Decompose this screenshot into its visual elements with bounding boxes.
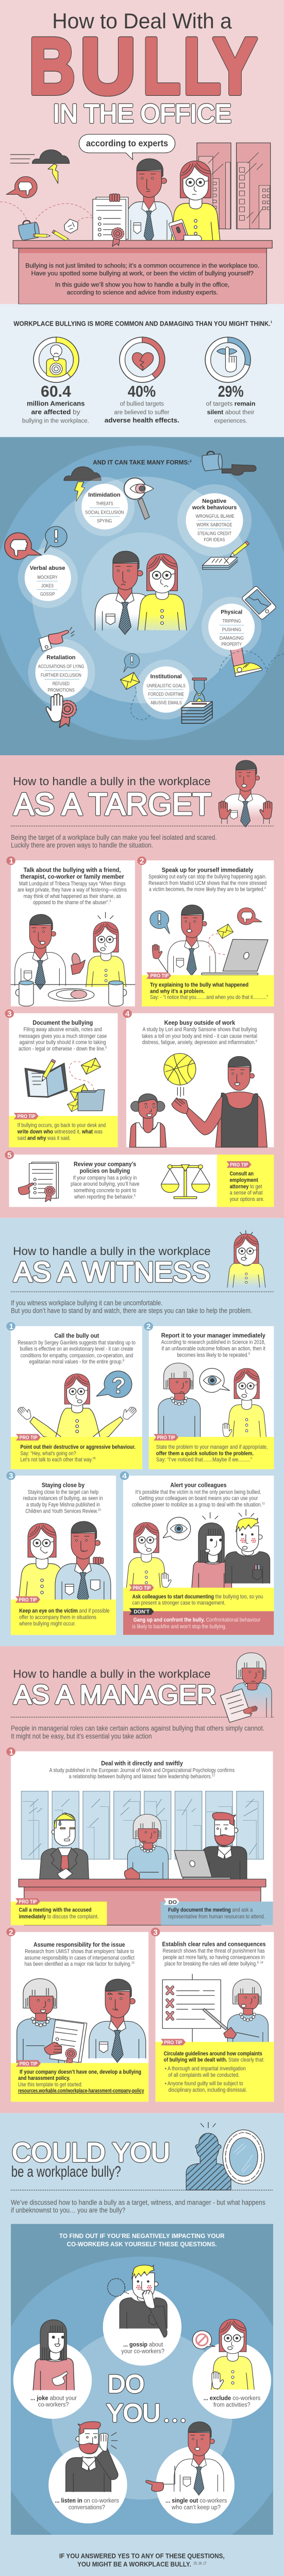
card 3: document the bullying: 5	[105, 1046, 107, 1049]
card 2: report to manager: becomes less likely to be repeated.	[177, 1352, 270, 1358]
badge 1	[6, 1322, 15, 1331]
badge 4: 4	[125, 1010, 130, 1019]
card 5: review company policies: 5	[134, 1194, 136, 1198]
card 2: assume responsibility: assume responsibility in cases of interpersonal conflict	[24, 1955, 135, 1961]
heading: as a witness: AS A WITNESS	[13, 1256, 210, 1287]
card 5: review company policies: Consult an	[230, 1171, 254, 1177]
card 1: call the bully out: Say: “Hey, what’s going on?	[20, 1451, 76, 1456]
card 5: review company policies: If your company has a policy in	[73, 1175, 137, 1181]
card 1: deal with it directly: Call a meeting with the accused	[19, 1907, 92, 1913]
title	[29, 9, 257, 128]
speech bubble: according to experts: according to experts	[86, 138, 168, 148]
illustration: alarmed woman	[227, 1230, 265, 1287]
panel: do you questions: CO-WORKERS ASK YOURSELF THESE QUESTIONS.	[67, 2241, 217, 2248]
badge 3: 3	[7, 1010, 12, 1019]
card 2: speak up: 4	[264, 886, 266, 890]
title: L	[143, 22, 180, 111]
question: joke	[13, 2320, 92, 2419]
card 3: staying close by: where bullying might occur.	[19, 1621, 76, 1627]
circle: verbal abuse: GOSSIP	[40, 591, 55, 597]
card 5: review company policies: place around bullying, you’ll have	[71, 1181, 140, 1188]
intro: manager	[11, 1724, 264, 1740]
circle: retaliation: FURTHER EXCLUSION	[41, 673, 81, 678]
circle: physical: PROPERTY	[221, 642, 242, 648]
office windows	[197, 143, 271, 229]
card 1: talk about the bullying	[11, 860, 135, 1006]
question: exclude: from activities?	[213, 2401, 250, 2409]
card 1: talk about the bullying: may think of what happened as their shame, as	[24, 893, 121, 900]
card 4: alert your colleagues: 11	[262, 1502, 265, 1505]
illustration: policy document and hand	[93, 194, 128, 241]
card 5: review company policies	[9, 1155, 274, 1207]
circle: retaliation: Retaliation	[46, 655, 76, 660]
card 1: deal with it directly: a relationship between bullying and laissez faire leadership behaviors.	[69, 1774, 254, 1780]
card 2: assume responsibility: Research from UMIST shows that employers’ failure to	[25, 1948, 134, 1955]
card 4: alert your colleagues: Alert your colleagues	[170, 1482, 227, 1489]
circle: institutional: ABUSIVE EMAILS	[151, 700, 182, 706]
card 4: keep busy	[126, 1013, 274, 1147]
header section background	[0, 0, 284, 304]
badge 4: 4	[122, 1472, 127, 1481]
card 2: assume responsibility: Assume responsibility for the issue	[34, 1941, 125, 1948]
card 1: call the bully out: Research by Sergey Gavrilets suggests that standing up to	[18, 1340, 136, 1346]
stat: 40 percent: adverse health effects.	[105, 416, 179, 424]
card 3: staying close by: Children and Youth Services Review.	[25, 1509, 123, 1514]
section background: could you	[0, 2113, 284, 2576]
do you lettering: DO	[108, 2370, 144, 2398]
card 5: review company policies: when reporting the behavior.	[74, 1194, 149, 1200]
card 3: document the bullying: Filing away abusive emails, notes and	[24, 1027, 102, 1033]
card 3: document the bullying: against your bully should it come to taking	[20, 1040, 106, 1046]
circle: negative work behaviours: WORK SABOTAGE	[196, 522, 232, 528]
circle: intimidation	[64, 467, 154, 536]
card 1: call the bully out: Let’s not talk to each other that way.”	[20, 1457, 118, 1463]
circle: retaliation: REFUSED	[53, 681, 70, 687]
card 4: keep busy: 6	[256, 1040, 257, 1043]
conclusion text: YOU MIGHT BE A WORKPLACE BULLY.	[77, 2561, 191, 2568]
divider	[11, 1291, 274, 1293]
card 3: staying close by: Staying close to the target can help	[28, 1489, 98, 1495]
card 2: assume responsibility: Use this template to get started:	[18, 2082, 82, 2088]
circle: negative work behaviours: Negative	[202, 498, 226, 504]
question: listen in: ... listen in on co-workers	[55, 2497, 119, 2504]
card 1: call the bully out	[11, 1326, 142, 1469]
card 2: report to manager: offer them a quick solution to the problem.	[156, 1451, 254, 1456]
badge 3	[6, 1471, 15, 1481]
card 1: talk about the bullying: opposed to the shame of the abuser”.	[33, 900, 132, 906]
desk	[13, 241, 272, 304]
title: U	[80, 22, 136, 111]
badge 3	[5, 1009, 14, 1019]
card 3: staying close by: a study by Faye Mishna published in	[26, 1502, 100, 1508]
intro: target: Being the target of a workplace bully can make you feel isolated and scared.	[11, 834, 217, 842]
speech bubble: according to experts	[79, 134, 175, 160]
intro text: Bullying is not just limited to schools; it’s a common occurrence in the workplace too.	[25, 262, 259, 269]
circle: institutional: Institutional	[151, 674, 182, 680]
card 5: review company policies: policies on bullying	[80, 1167, 130, 1175]
card 3: document the bullying: If bullying occurs, go back to your desk and	[18, 1123, 106, 1129]
title: IN THE OFFICE	[53, 99, 231, 128]
heading: as a target: How to handle a bully in the workplace	[13, 775, 211, 788]
stat: 60.4 million: 60.4	[41, 382, 71, 400]
conclusion text: IF YOU ANSWERED YES TO ANY OF THESE QUESTIONS,	[59, 2552, 225, 2560]
card 1: talk about the bullying: 3	[109, 900, 111, 903]
card 2: report to manager: 9	[248, 1352, 250, 1355]
circle: verbal abuse: MOCKERY	[37, 575, 58, 580]
card 3: staying close by: 10	[98, 1508, 101, 1512]
card 3: document the bullying: Document the bullying	[32, 1019, 93, 1026]
card 3: document the bullying: action - legal or otherwise - down the line.	[19, 1046, 129, 1052]
card 1: call the bully out: egalitarian moral values - for the entire group.	[29, 1359, 149, 1365]
card 3: document the bullying: PRO TIP	[18, 1113, 36, 1120]
stat: 29 percent: 29%	[218, 382, 244, 400]
card 3: clear rules: of bullying will be dealt with. State clearly that:	[164, 2057, 264, 2063]
intro: target	[11, 834, 217, 850]
heading: as a manager	[13, 1668, 216, 1710]
card 2: speak up: Speak up for yourself immediately	[162, 867, 253, 873]
intro: witness	[11, 1299, 252, 1315]
card 2: assume responsibility: resources.workable.com/workplace-harassment-company-policy	[18, 2088, 144, 2094]
question: single out: who can’t keep up?	[171, 2504, 221, 2511]
card 1: deal with it directly: DO	[169, 1900, 177, 1905]
question: listen in: conversations?	[69, 2504, 105, 2511]
circle: intimidation: THREATS	[96, 501, 113, 507]
circle: verbal abuse: JOKES	[41, 583, 54, 589]
stat: 40 percent	[105, 337, 179, 424]
question: gossip	[103, 2265, 181, 2366]
card 1: deal with it directly: PRO TIP	[19, 1899, 37, 1905]
circle: verbal abuse: Verbal abuse	[30, 565, 65, 571]
circle: retaliation: ACCUSATIONS OF LYING	[38, 664, 84, 670]
heading: stats: 1	[271, 320, 272, 324]
card 1: deal with it directly: immediately to discuss the complaint.	[19, 1914, 99, 1920]
stat: 40 percent: are believed to suffer	[114, 409, 170, 416]
badge 3	[151, 1928, 160, 1937]
circle: intimidation: SPYING	[97, 518, 112, 524]
stats section background	[0, 304, 284, 437]
circle: physical: TRIPPING	[223, 619, 241, 624]
badge 2	[6, 1928, 15, 1937]
card 2: report to manager: PRO TIP	[157, 1435, 175, 1440]
card 2: speak up	[142, 860, 274, 1006]
card 1: call the bully out: 5	[94, 1457, 96, 1461]
card 2: assume responsibility: 13	[131, 1961, 135, 1965]
circle: physical	[202, 586, 284, 676]
card 4: keep busy: Keep busy outside of work	[164, 1019, 235, 1026]
divider	[11, 825, 274, 827]
title: B	[29, 22, 75, 111]
card 3: clear rules	[156, 1932, 274, 2102]
question: joke: co-workers?	[38, 2401, 69, 2408]
card 3: staying close by: Staying close by	[42, 1482, 85, 1489]
badge 5	[5, 1150, 14, 1160]
card 5: review company policies: Review your company’s	[74, 1161, 136, 1167]
illustration: worried man and woman	[95, 551, 187, 635]
question: gossip: ... gossip about	[123, 2341, 163, 2348]
forms section background	[0, 437, 284, 755]
badge 2	[137, 856, 146, 866]
card 3: document the bullying: messages gives you a much stronger case	[19, 1033, 107, 1039]
card 4: alert your colleagues: is likely to backfire and won’t stop the bullying.	[132, 1624, 226, 1630]
intro: target: Luckily there are proven ways to handle the situation.	[11, 841, 153, 850]
illustration: thrown mug, pencils and paper	[0, 202, 92, 243]
card 1: deal with it directly	[11, 1751, 273, 1925]
heading: could you be a workplace bully: COULD YOU	[12, 2138, 170, 2167]
question: gossip: your co-workers?	[121, 2348, 164, 2354]
card 3: clear rules: disciplinary action, including dismissal.	[169, 2087, 247, 2093]
card 3: staying close by: offer to accompany them in situations	[19, 1615, 96, 1620]
question: exclude	[193, 2319, 271, 2419]
section background: as a manager	[0, 1646, 284, 2113]
section background: as a target	[0, 755, 284, 1218]
intro text	[25, 262, 259, 296]
card 1: call the bully out: bullies is effective on an evolutionary level - it can create	[20, 1346, 133, 1352]
card 1: call the bully out: Call the bully out	[54, 1332, 99, 1340]
card 5: review company policies: something concrete to point to	[74, 1188, 136, 1194]
card 5: review company policies: your options are.	[230, 1196, 264, 1202]
illustration: woman at desk	[169, 161, 220, 246]
do you lettering	[107, 2370, 185, 2427]
card 2: speak up: and why it’s a problem.	[150, 989, 205, 994]
badge 4	[123, 1009, 132, 1019]
title: B	[29, 22, 75, 111]
card 2: assume responsibility	[11, 1932, 148, 2102]
card 1: call the bully out: 8	[123, 1359, 124, 1363]
card 2: report to manager: Report it to your manager immediately	[161, 1332, 265, 1339]
card 3: document the bullying	[9, 1013, 118, 1147]
card 2: speak up: PRO TIP	[151, 973, 169, 979]
card 3: clear rules: Establish clear rules and consequences	[162, 1941, 266, 1947]
heading: many forms: AND IT CAN TAKE MANY FORMS:	[93, 459, 198, 466]
card 3: staying close by	[11, 1476, 116, 1635]
card 1: call the bully out: ?	[111, 1374, 126, 1398]
title: How to Deal With a	[52, 9, 232, 33]
title: Y	[213, 22, 257, 111]
stat: 60.4 million: bullying in the workplace.	[22, 417, 89, 425]
heading: could you be a workplace bully: be a workplace bully?	[11, 2164, 121, 2180]
title: IN THE OFFICE	[53, 99, 231, 128]
card 1: call the bully out: Point out their destructive or aggressive behaviour.	[20, 1444, 136, 1450]
icon: thumbs down bubble	[6, 177, 37, 198]
card 4: alert your colleagues: Ask colleagues to start documenting the bullying too, so you	[132, 1594, 263, 1600]
card 3: clear rules: PRO TIP	[164, 2040, 182, 2045]
divider	[11, 2189, 274, 2191]
conclusion text: 15, 16, 17	[193, 2561, 207, 2566]
section background: as a witness	[0, 1218, 284, 1646]
panel: do you questions	[11, 2224, 273, 2535]
badge 4	[120, 1471, 129, 1481]
intro: witness: If you witness workplace bullying it can be uncomfortable.	[11, 1299, 163, 1308]
card 1: talk about the bullying: are kept private, they have a way of festering—victims	[18, 887, 127, 893]
badge 2: 2	[140, 857, 144, 866]
stat: 60.4 million: million Americans	[27, 400, 85, 407]
do you lettering: YOU	[107, 2399, 160, 2427]
card 3: document the bullying: write down who witnessed it, what was	[17, 1129, 103, 1135]
card 2: speak up: Try explaining to the bully what happened	[150, 982, 248, 988]
card 2: assume responsibility: PRO TIP	[20, 2061, 38, 2067]
badge 1	[6, 856, 15, 866]
circle: institutional	[120, 654, 212, 723]
card 1: talk about the bullying: Matt Lundquist of Tribeca Therapy says “When things	[19, 881, 126, 887]
stat: 29 percent: of targets remain	[206, 400, 255, 407]
question: joke: ... joke about your	[30, 2395, 77, 2401]
intro: could you: if unbeknownst to you… you are the bully?	[11, 2207, 125, 2214]
card 3: document the bullying: said and why was it said.	[18, 1136, 71, 1141]
circle: negative work behaviours: FOR IDEAS	[204, 537, 225, 543]
circle: physical: DAMAGING	[220, 636, 244, 641]
card 4: alert your colleagues: can present a stronger case to management.	[132, 1600, 225, 1606]
title: L	[143, 22, 180, 111]
heading: could you be a workplace bully	[11, 2138, 170, 2180]
title: U	[80, 22, 136, 111]
title: L	[183, 22, 221, 111]
circle: institutional: FORCED OVERTIME	[148, 692, 184, 698]
illustration: silhouette and mirror	[186, 2122, 264, 2190]
intro text: In this guide we’ll show you how to handle a bully in the office,	[55, 281, 229, 289]
card 5: review company policies: PRO TIP	[230, 1162, 248, 1168]
card 3: clear rules: • Anyone found guilty will be subject to	[165, 2081, 243, 2087]
card 1: talk about the bullying: therapist, co-worker or family member	[21, 873, 124, 880]
stat: 40 percent: 40%	[128, 382, 156, 400]
heading: as a manager: How to handle a bully in the workplace	[13, 1668, 211, 1681]
icon: storm cloud	[10, 150, 70, 183]
stat: 29 percent	[205, 337, 255, 425]
card 1: deal with it directly: Fully document the meeting and ask a	[168, 1907, 253, 1913]
conclusion text	[59, 2552, 225, 2568]
heading: as a witness: How to handle a bully in the workplace	[13, 1245, 211, 1258]
circle: negative work behaviours: work behaviours	[192, 505, 237, 511]
card 1: deal with it directly: 12	[212, 1774, 215, 1777]
intro text: according to science and advice from industry experts.	[67, 289, 218, 296]
illustration: man with raised hands	[219, 760, 272, 827]
circle: verbal abuse	[5, 527, 78, 608]
card 4: alert your colleagues: Gang up and confront the bully. Confrontational behaviour	[133, 1617, 261, 1623]
card 1: talk about the bullying: Talk about the bullying with a friend,	[24, 867, 121, 873]
circle: intimidation: SOCIAL EXCLUSION	[85, 510, 124, 515]
title: Y	[213, 22, 257, 111]
card 3: clear rules: place for breaking the rules will deter bullying.	[164, 1961, 284, 1967]
card 4: alert your colleagues	[123, 1476, 274, 1635]
card 2: assume responsibility: has been identified as a major risk factor for bullying.	[24, 1961, 164, 1968]
heading: as a manager: AS A MANAGER	[13, 1680, 216, 1710]
stat: 60.4 million: are affected by	[31, 408, 80, 416]
question: single out: ... single out co-workers	[165, 2497, 227, 2504]
circle: retaliation	[28, 627, 95, 727]
illustration: man at desk	[125, 159, 173, 244]
badge 1: 1	[9, 1323, 13, 1331]
intro: could you	[11, 2199, 265, 2214]
circle: negative work behaviours: STEALING CREDIT	[197, 531, 231, 536]
card 5: review company policies: a sense of what	[230, 1190, 263, 1196]
badge 3: 3	[9, 1472, 13, 1481]
badge 1: 1	[9, 857, 13, 866]
circle: retaliation: PROMOTIONS	[47, 688, 75, 693]
badge 5: 5	[7, 1151, 12, 1160]
circle: intimidation: Intimidation	[88, 492, 121, 498]
circle: institutional: UNREALISTIC GOALS	[147, 683, 186, 689]
card 4: alert your colleagues: PRO TIP	[133, 1585, 151, 1591]
title: L	[183, 22, 221, 111]
card 3: clear rules: • A thorough and impartial investigation	[165, 2066, 246, 2072]
card 2: report to manager	[149, 1326, 274, 1469]
illustration: manager with clipboard	[221, 1653, 272, 1722]
card 3: staying close by: Keep an eye on the victim and if possible	[19, 1608, 110, 1614]
divider	[11, 1716, 274, 1718]
card 2: report to manager: Say: “I’ve noticed that.......Maybe if we.........”	[156, 1457, 252, 1463]
badge 2: 2	[146, 1323, 151, 1331]
card 1: call the bully out: PRO TIP	[20, 1435, 38, 1440]
question: single out	[146, 2422, 235, 2523]
badge 2	[144, 1322, 153, 1331]
do you lettering: YOU	[107, 2399, 160, 2427]
stat: 40 percent: of bullied targets	[120, 400, 164, 407]
card 4: keep busy: distress, fatigue, anxiety, depression and inflammation.	[142, 1040, 284, 1046]
stat: 60.4 million	[22, 337, 89, 425]
heading: many forms: 2	[190, 460, 192, 463]
card 4: alert your colleagues: DON’T	[133, 1609, 150, 1615]
circle: negative work behaviours: WRONGFUL BLAME	[196, 514, 235, 519]
intro: manager: It might not be easy, but it’s essential you take action	[11, 1733, 152, 1740]
badge 1: 1	[9, 1748, 13, 1756]
heading: as a manager: AS A MANAGER	[13, 1680, 216, 1710]
panel: do you questions: TO FIND OUT IF YOU’RE NEGATIVELY IMPACTING YOUR	[59, 2232, 225, 2240]
circle: physical: Physical	[221, 609, 242, 616]
heading: as a target: AS A TARGET	[13, 787, 211, 822]
card 3: clear rules: of all complaints will be conducted.	[169, 2072, 240, 2078]
heading: could you be a workplace bully: COULD YOU	[12, 2138, 170, 2167]
card 5: review company policies: attorney to get	[230, 1184, 262, 1190]
circle: negative work behaviours	[177, 451, 256, 569]
card 2: assume responsibility: If your company doesn’t have one, develop a bullying	[20, 2069, 141, 2075]
card 3: clear rules: 9, 14	[257, 1961, 263, 1964]
circle: physical: PUSHING	[222, 627, 241, 633]
question: listen in	[48, 2421, 127, 2523]
badge 2: 2	[9, 1928, 13, 1937]
badge 1	[6, 1748, 15, 1756]
badge 3: 3	[153, 1928, 158, 1937]
heading: as a target: AS A TARGET	[13, 787, 211, 822]
card 3: staying close by: reduce instances of bullying, as seen in	[23, 1496, 103, 1502]
stat: 29 percent: experiences.	[214, 417, 247, 425]
card 2: assume responsibility: and harassment policy.	[18, 2075, 70, 2081]
card 1: deal with it directly: Deal with it directly and swiftly	[101, 1760, 183, 1767]
card 1: call the bully out: conditions for empathy, compassion, co-operation, and	[21, 1353, 133, 1359]
card 5: review company policies: employment	[230, 1177, 258, 1183]
rosette on document	[111, 228, 124, 246]
heading: as a witness: AS A WITNESS	[13, 1256, 210, 1287]
card 3: staying close by: PRO TIP	[19, 1597, 37, 1603]
do you lettering: DO	[108, 2370, 144, 2398]
question: exclude: ... exclude co-workers	[204, 2395, 260, 2402]
intro text: Have you spotted some bullying at work, or been the victim of bullying yourself?	[31, 270, 254, 277]
stat: 29 percent: silent about their	[207, 409, 255, 416]
